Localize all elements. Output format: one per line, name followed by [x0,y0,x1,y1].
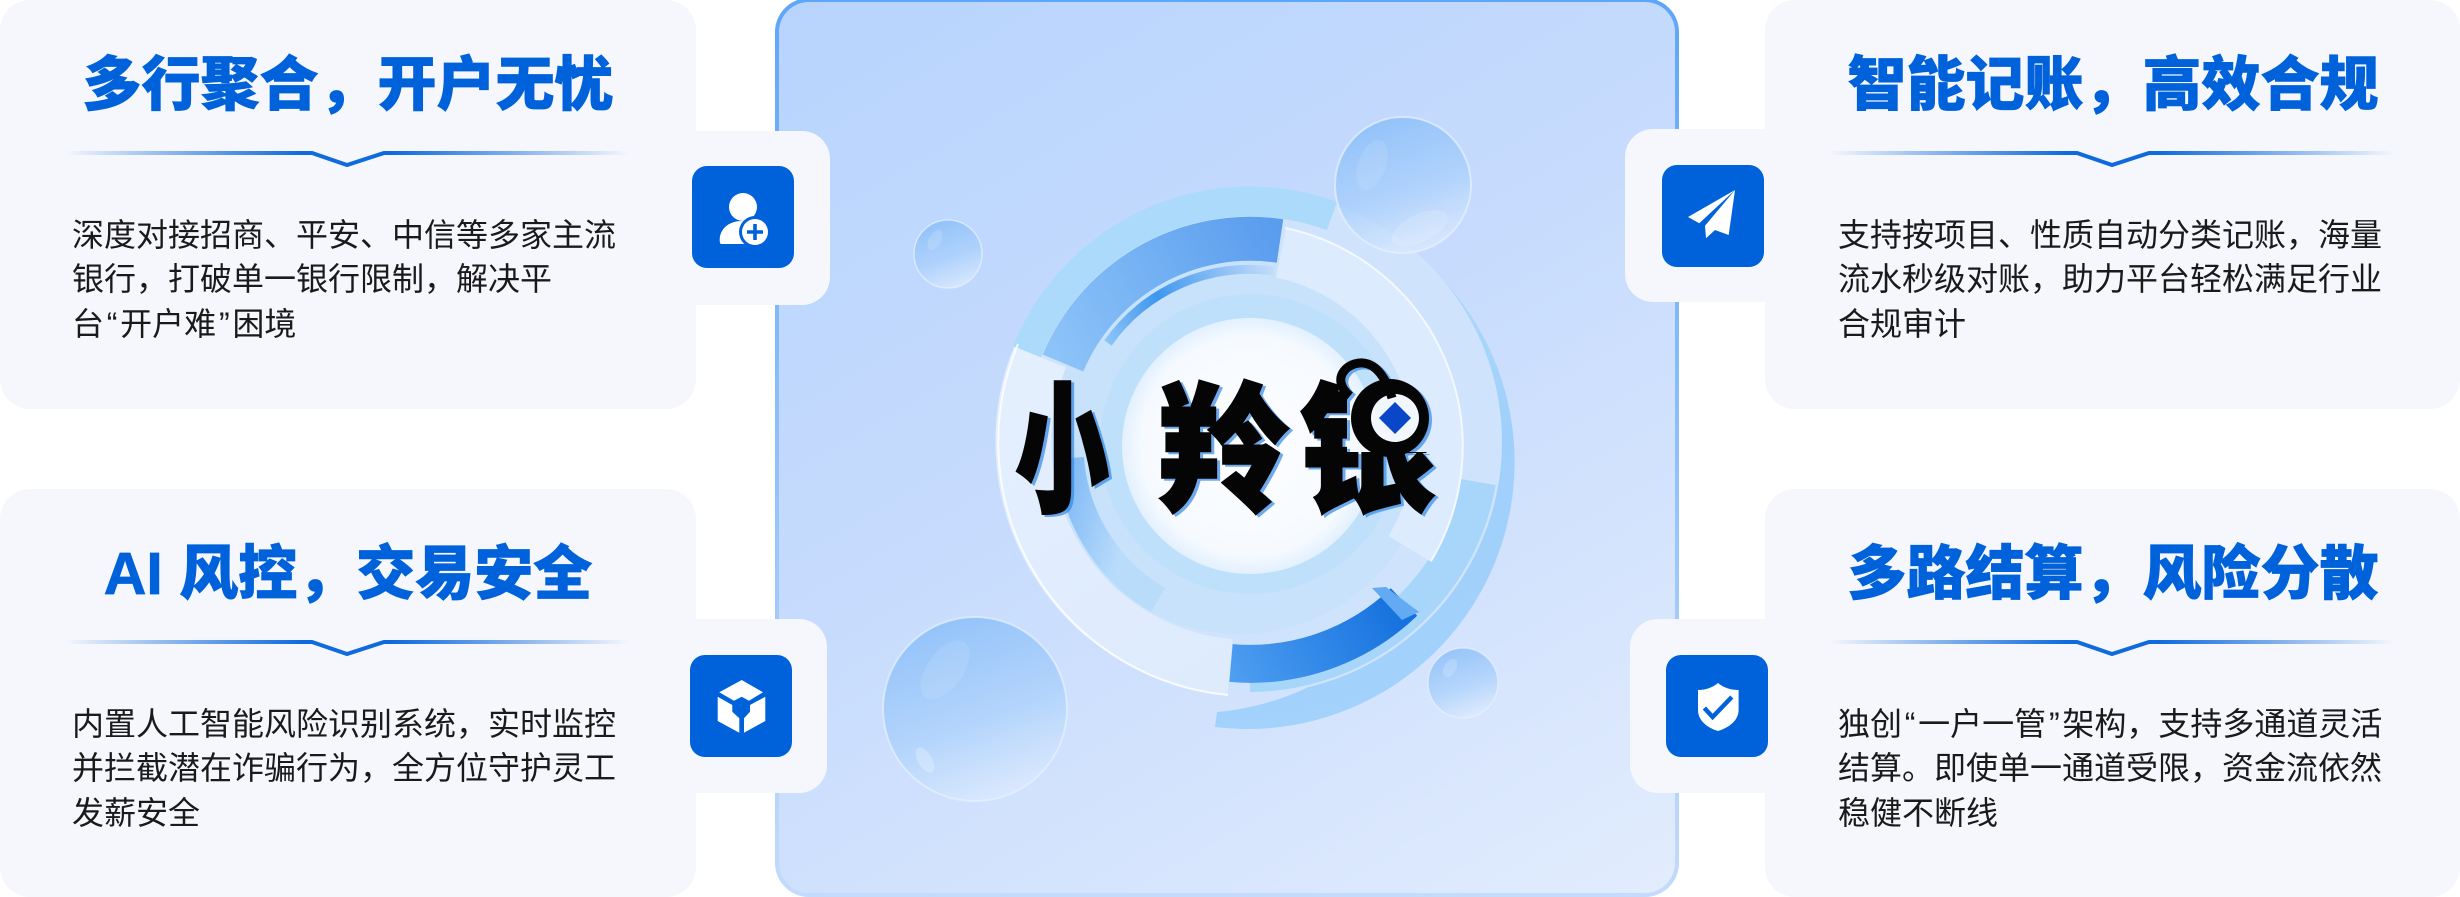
ring: inner light blue ring [1100,294,1400,594]
body text: 深度对接招商、平安、中信等多家主流 [72,217,616,253]
divider with notch [73,640,621,656]
heading: 多路结算，风险分散 [1847,541,2378,607]
arc: right glass segment [1281,253,1438,549]
tab: top right connector [1625,129,1771,302]
body text [72,706,616,831]
tab: bottom left connector [690,619,827,793]
logo: coin ring [1341,363,1429,457]
body text: 结算。即使单一通道受限，资金流依然 [1838,750,2382,786]
body text: 流水秒级对账，助力平台轻松满足行业 [1838,261,2382,297]
icon: user with plus [692,166,794,268]
bubble: small left [914,220,982,288]
heading: 多行聚合，开户无忧 [82,52,614,118]
ring: right inner band [1050,254,1430,634]
ring: inner white disc [1122,318,1378,574]
panel: AI risk control [0,489,696,897]
divider with notch [1838,151,2386,168]
body text: 银行，打破单一银行限制，解决平 [72,261,552,297]
body text: 并拦截潜在诈骗行为，全方位守护灵工 [72,750,616,786]
body text [1838,217,2382,342]
central artwork [882,116,1515,802]
icon: paper plane [1662,165,1764,267]
body text [72,217,616,342]
logo wordmark [1016,363,1437,531]
body text: 合规审计 [1838,306,1966,342]
bubble: top right [1335,117,1471,253]
arc: bottom bevel [1372,587,1419,620]
arc: left glass rim [998,344,1228,695]
panel: multi-route settlement [1765,489,2460,897]
logo wordmark: 羚 [1156,375,1290,531]
bubble: small bottom right [1428,648,1498,718]
ring: outer blue band [1215,205,1515,729]
tab: bottom right connector [1630,619,1771,793]
arc: upper thin blue [1108,269,1274,343]
arc: top left blue segment [1063,239,1280,363]
panel: smart bookkeeping [1765,0,2460,409]
ring: upper pale band [1024,201,1332,360]
logo wordmark: 银 [1298,373,1437,530]
ring: base glass disc [998,190,1502,694]
divider with notch [1838,640,2386,656]
tab: top left connector [690,131,830,305]
ring: lower right blue band [1250,482,1478,674]
body text: 稳健不断线 [1838,795,1998,831]
body text: 台“开户难”困境 [72,306,296,342]
body text: 内置人工智能风险识别系统，实时监控 [72,706,616,742]
arc: right glass rim [1285,228,1463,561]
logo wordmark: 小 [1016,375,1108,531]
panel: central logo panel [775,0,1679,897]
icon: shield with check [1666,655,1768,757]
heading: AI 风控，交易安全 [104,541,592,607]
body text: 独创“一户一管”架构，支持多通道灵活 [1838,706,2382,742]
arc: lower left blue shade [1070,458,1158,600]
panel: multi-bank aggregation [0,0,696,409]
body text [1838,706,2382,831]
body text: 支持按项目、性质自动分类记账，海量 [1838,217,2382,253]
bubble: large bottom left [883,617,1067,801]
arc: bottom blue segment [1231,602,1404,664]
arc: left glass segment [1023,357,1230,667]
body text: 发薪安全 [72,795,200,831]
divider with notch [73,151,621,168]
icon: cube [690,655,792,757]
heading: 智能记账，高效合规 [1847,52,2378,118]
